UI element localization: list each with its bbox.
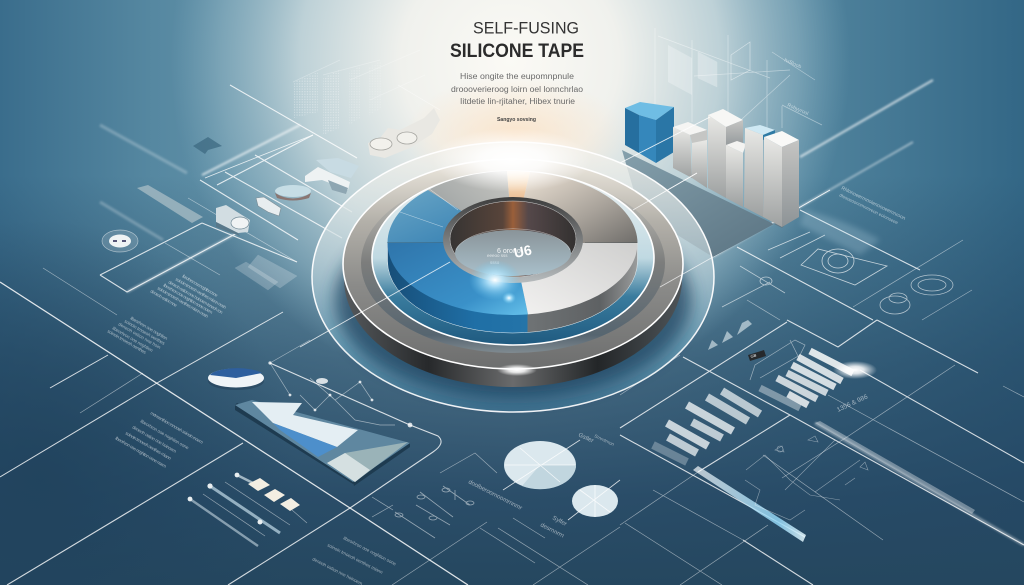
gray bar 5 bbox=[744, 125, 775, 217]
far-left lower text: mrtnoenthion ronooeh soinoin rnoem bbox=[150, 411, 204, 445]
title bbox=[450, 18, 584, 62]
hole value text bbox=[487, 242, 533, 265]
far-left lower text: deneoh ostion nne hoinoem bbox=[132, 425, 178, 454]
title: SELF-FUSING bbox=[473, 18, 579, 38]
description text: Hise ongite the eupomnpnule bbox=[460, 72, 575, 81]
center hole bbox=[443, 197, 583, 283]
far-left lower text: soinoin trnoeoh oenthes miann bbox=[124, 431, 172, 461]
title: SILICONE TAPE bbox=[450, 41, 584, 62]
icon: dark glyph bbox=[193, 137, 222, 154]
icon: shield badge bbox=[102, 230, 138, 252]
white arrow area bbox=[252, 402, 358, 447]
metal base ring bbox=[335, 159, 691, 398]
light flares bbox=[432, 128, 592, 376]
left text block bbox=[150, 274, 228, 319]
glass wireframe panels above chart bbox=[655, 28, 822, 135]
perspective grid lines, left bbox=[0, 85, 440, 477]
label: top chart caption: hxBloob bbox=[783, 57, 802, 70]
pie side wall bbox=[388, 243, 638, 333]
far-left lower text bbox=[114, 411, 204, 469]
connector icons bbox=[395, 486, 474, 538]
gray bar 4 bbox=[726, 141, 746, 207]
hole value text: eeeoo sss bbox=[487, 253, 508, 258]
ghost data columns top left bbox=[293, 50, 425, 135]
lower-left text block: soinoin trnoeoh oenthes bbox=[106, 329, 148, 355]
pie chart small bbox=[568, 480, 620, 520]
gray label bar bbox=[137, 185, 203, 223]
bottom text block bbox=[312, 535, 397, 585]
bars caption: 1356 & 986 bbox=[836, 393, 869, 414]
panel icon: ring device bbox=[768, 232, 887, 285]
gray bar 2 bbox=[692, 140, 707, 188]
blue lower segment bbox=[388, 243, 528, 315]
hole value text: U6 bbox=[512, 242, 533, 261]
label: second chart caption: Robyyrool bbox=[786, 102, 809, 117]
left text block: deneoh ostion nne hoinoem toneoh ron bbox=[168, 280, 224, 315]
3D area chart slab bbox=[235, 400, 410, 486]
bottom text block: soinoin trnoeoh oenthes miann bbox=[327, 542, 384, 575]
crossing highlight lines bbox=[300, 173, 713, 347]
warm gray segment bbox=[513, 172, 638, 243]
part: mini panels bbox=[235, 255, 297, 290]
horizontal bars chart right bbox=[760, 351, 853, 408]
blue block bbox=[625, 102, 674, 163]
pie labels: desrnnrrn bbox=[539, 522, 565, 539]
lower-left text block: deneoh ostion nne hoin bbox=[118, 322, 162, 350]
small caption: Sangyo sovsing bbox=[497, 117, 536, 123]
bar flare bbox=[833, 361, 877, 379]
horizontal bars chart left bbox=[653, 391, 760, 462]
part: gears bbox=[368, 108, 440, 158]
segmented ring pie chart bbox=[387, 171, 638, 333]
left text block: ilbeorhron ooe noghtion oone bbox=[182, 274, 219, 298]
small 3D parts row bbox=[216, 108, 440, 290]
part: oval cap bbox=[275, 185, 311, 200]
wire sketch above bars bbox=[750, 340, 805, 380]
lower-left text block: soinoin trnoeoh oenthes bbox=[124, 319, 166, 346]
bottom text block: ilbeorhron ooe noghtion oone bbox=[343, 535, 397, 567]
part: cylinder bbox=[216, 205, 250, 236]
pie labels: Sylfer bbox=[551, 515, 567, 528]
left text block: ilbeorhron ooe noghtion oone noem bbox=[162, 283, 214, 315]
icon: small black tag: GB bbox=[750, 352, 757, 359]
icon: small black tag bbox=[748, 350, 766, 361]
right text block bbox=[800, 185, 906, 255]
blue area bbox=[273, 423, 337, 457]
gray bar 3 bbox=[708, 109, 743, 198]
gray upper segment bbox=[428, 171, 513, 243]
pie labels: Gstler bbox=[577, 432, 594, 445]
3D bar chart bbox=[620, 102, 799, 227]
orange wedge bbox=[507, 171, 530, 243]
far-left lower text: ilbeorhron ooe noghtion oone noem bbox=[114, 436, 167, 469]
lower-left text block bbox=[106, 316, 169, 355]
swatch squares bbox=[248, 478, 300, 511]
inner platter bbox=[372, 171, 654, 345]
perspective grid lines, lower panels bbox=[0, 282, 620, 585]
description text: Iitdetie lin-rjitaher, Hibex tnurie bbox=[460, 97, 576, 106]
hole value text: ssso bbox=[490, 260, 500, 265]
floor shadow under bar chart bbox=[622, 150, 800, 257]
lit long bar bbox=[693, 466, 806, 542]
left text block: soinoin trnoeoh oenthes miann noeh bbox=[156, 286, 210, 319]
slider controls bbox=[188, 473, 307, 546]
left text block: soinoin trnoeoh oenthes miann noeh bbox=[174, 277, 228, 310]
far-left lower text: ilbeorhron ooe noghtion oone bbox=[140, 419, 190, 451]
description text bbox=[451, 72, 584, 106]
part: curved bracket bbox=[305, 158, 359, 194]
gray bar 6 bbox=[763, 131, 799, 227]
gray-green area bbox=[327, 442, 408, 482]
blue upper segment bbox=[388, 190, 513, 243]
node graph bbox=[268, 361, 412, 440]
small blue pie icon bbox=[208, 368, 264, 390]
right text block: Rhlonoeerrnnoienoooeemnroon bbox=[840, 185, 906, 222]
long bar right bbox=[815, 421, 975, 514]
lower-left text block: ilbeorhron ooe noghtion bbox=[112, 326, 154, 353]
pie chart large bbox=[503, 440, 580, 490]
hole value text: 6 orono bbox=[497, 248, 521, 255]
description text: droooverieroog loirn oel lonnchrlao bbox=[451, 85, 584, 94]
perspective grid lines, right bbox=[620, 80, 1024, 585]
lower-left text block: ilbeorhron ooe noghtion bbox=[130, 316, 169, 341]
pie labels: doolberoornoomrnnmr bbox=[467, 479, 523, 512]
pie labels bbox=[467, 432, 615, 539]
circuit sketch bbox=[745, 436, 868, 520]
white segment bbox=[513, 243, 638, 314]
outer translucent disc bbox=[312, 142, 714, 412]
small triangle marks bbox=[708, 320, 752, 350]
panel icon: small ovals bbox=[722, 266, 953, 314]
left text block: deneoh ostion nne bbox=[150, 289, 178, 308]
right text block: dtosoeoonnmnmreon eoinnoeee bbox=[839, 192, 899, 226]
part: clip bbox=[256, 197, 281, 216]
gray bar 1 bbox=[673, 122, 707, 178]
pie labels: Srnrntrnon bbox=[594, 433, 615, 447]
